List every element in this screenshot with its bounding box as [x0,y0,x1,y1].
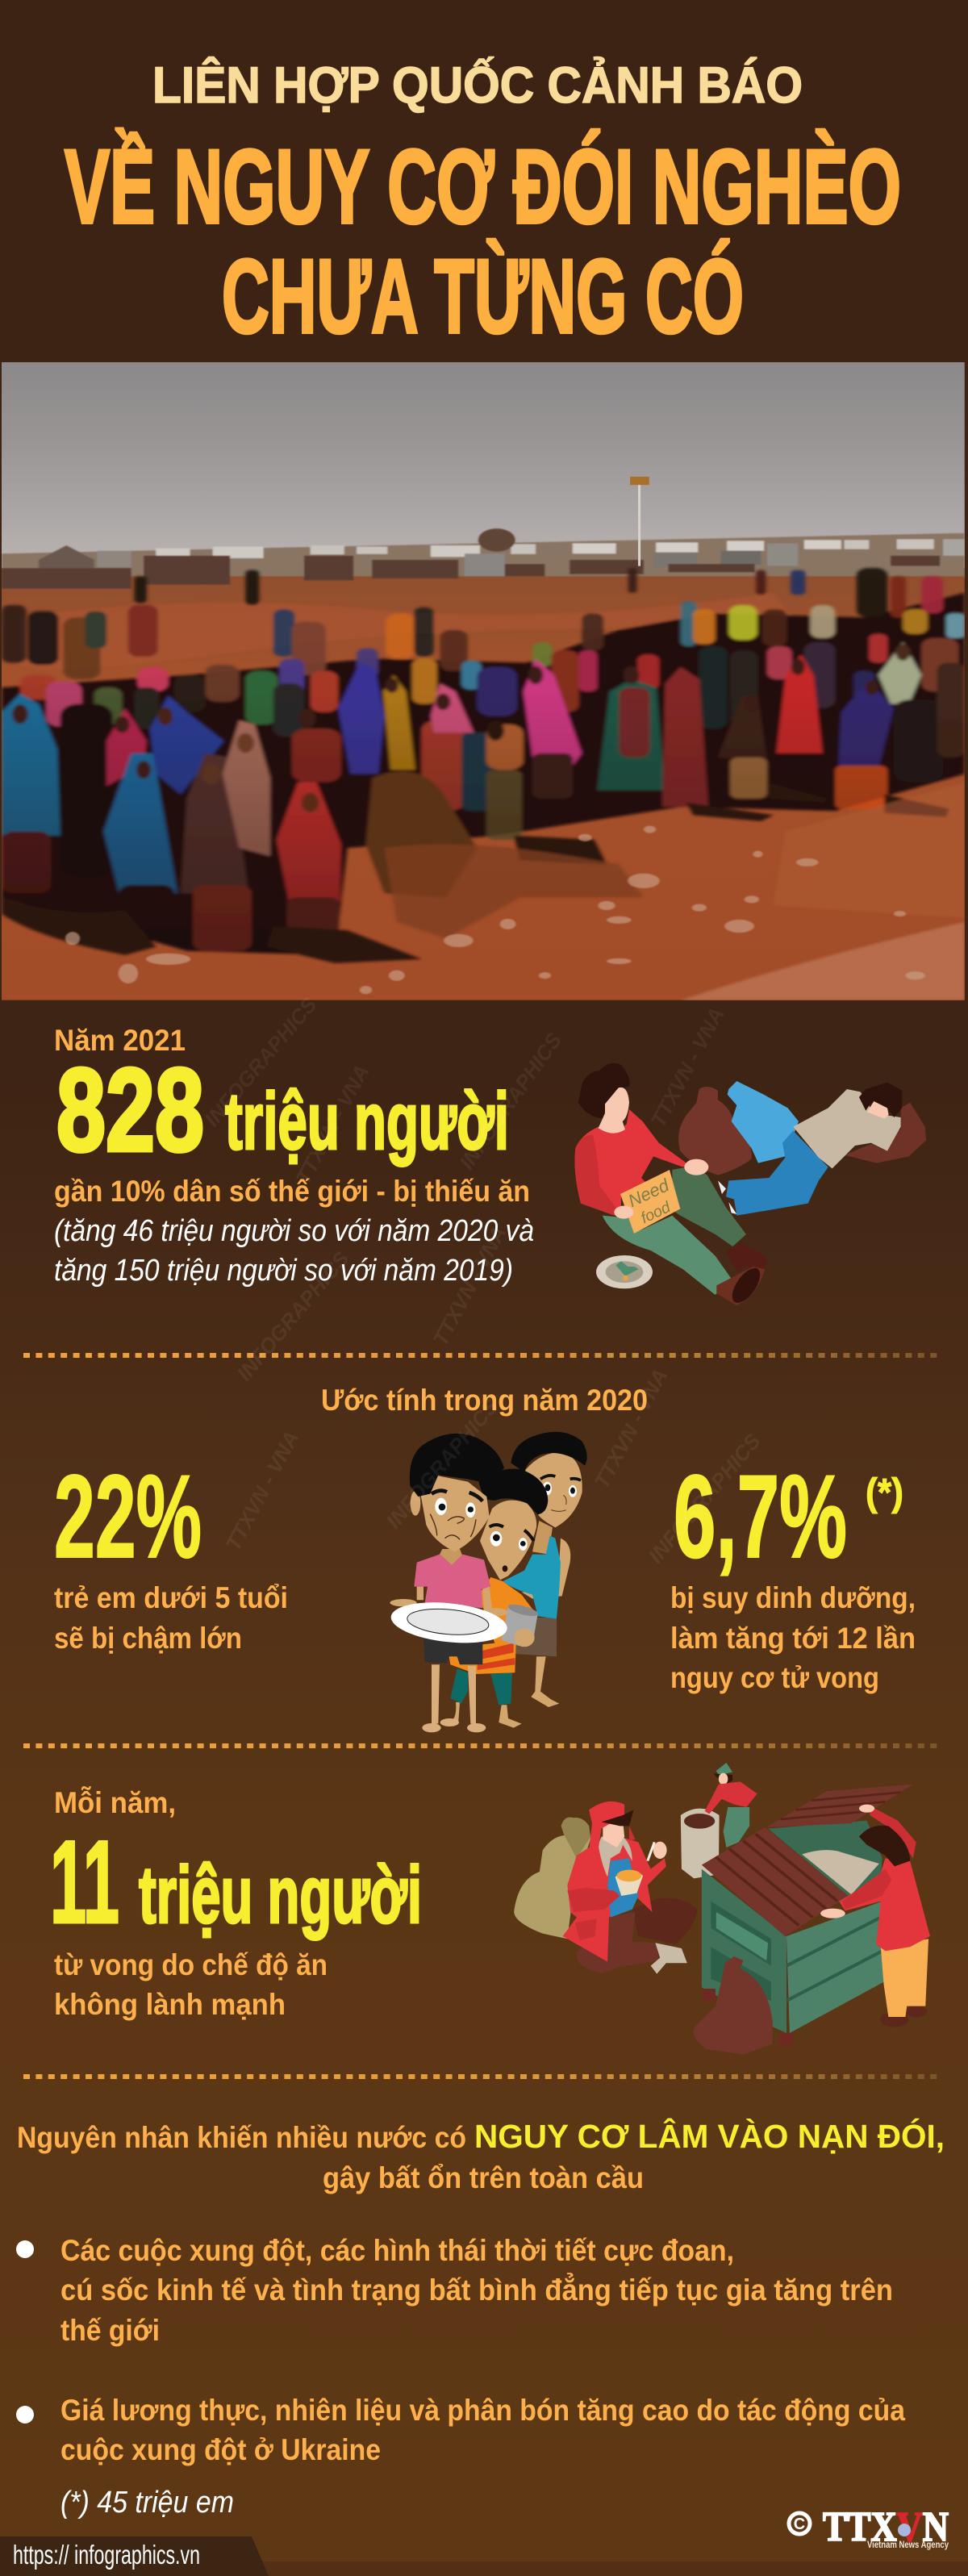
crowd base mass [2,593,965,955]
need food sign: food [639,1199,674,1227]
divider 3 [23,2074,941,2079]
stat: 11 million: từ vong do chế độ ăn [54,1948,328,1981]
bullet 2: Giá lương thực, nhiên liệu và phân bón tăng cao do tác động của [60,2394,905,2427]
faces [12,704,28,724]
crowd shade [2,694,963,955]
title: LIÊN HỢP QUỐC CẢNH BÁO [152,56,803,114]
watermarks: INFOGRAPHICS [644,1429,766,1568]
photo: crowd waiting on red earth [2,360,965,1000]
brown bag [694,1956,773,2055]
stat: 11 million: 11 [50,1816,119,1948]
watermarks: INFOGRAPHICS [454,1028,566,1174]
causes heading [17,2118,945,2194]
stat: 6.7 percent [670,1451,916,1694]
italic note: tăng 150 triệu người so với năm 2019) [54,1254,513,1288]
stat: 6.7 percent: 6,7% [674,1451,847,1582]
illustration: three starving children [389,1432,587,1732]
divider 1 [23,1353,941,1358]
bullet 1: thế giới [60,2314,160,2347]
italic note: (tăng 46 triệu người so với năm 2020 và [54,1214,534,1248]
stat: 22 percent: 22% [54,1451,202,1582]
watermarks: TTXVN - VNA [220,1427,304,1555]
shrub [366,771,477,897]
left child [432,1664,476,1724]
middle child [452,1702,522,1728]
woman at dumpster [880,2012,909,2027]
front figures [2,694,60,836]
footnote: (*) 45 triệu em [60,2486,234,2520]
rocks [65,825,925,994]
label: year 2021: Năm 2021 [54,1024,186,1057]
footer band: https:// infographics.vn [13,2540,200,2570]
need food sign: Need [625,1175,673,1211]
back rows [273,609,295,657]
watermarks: TTXVN - VNA [428,1222,511,1350]
crowd [2,568,965,1000]
watermarks [200,992,766,1568]
stat: 11 million: triệu người [139,1850,422,1940]
stat: 6.7 percent: nguy cơ tử vong [670,1661,879,1694]
stat: 22 percent: sẽ bị chậm lớn [54,1622,242,1655]
section heading: estimate 2020: Ước tính trong năm 2020 [321,1384,648,1417]
watermarks: INFOGRAPHICS [200,992,322,1131]
stat: 6.7 percent: bị suy dinh dưỡng, [670,1581,916,1614]
stat: 22 percent [54,1451,288,1655]
dumpster [702,1869,786,2033]
watermarks: INFOGRAPHICS [232,1246,354,1385]
stat: 11 million: không lành mạnh [54,1988,286,2021]
watermarks: TTXVN - VNA [589,1365,673,1493]
stat: 11 million: Mỗi năm, [54,1786,176,1819]
hands and plate [390,1599,417,1606]
trash can [681,1809,720,1878]
illustration: people scavenging from a dumpster [514,1763,930,2055]
causes heading: Nguyên nhân khiến nhiều nước có [17,2121,466,2154]
stat: 6.7 percent: (*) [866,1472,903,1514]
bullet 2: cuộc xung đột ở Ukraine [60,2433,381,2466]
illustration: homeless people with need food sign [574,1063,926,1307]
stat: 22 percent: trẻ em dưới 5 tuổi [54,1581,288,1614]
stat: 11 million [50,1786,422,2021]
causes heading: NGUY CƠ LÂM VÀO NẠN ĐÓI, [474,2118,945,2155]
logo: TTXVN: C [794,2515,805,2533]
lighter dirt [774,782,965,918]
watermarks: INFOGRAPHICS [382,1394,503,1533]
italic note [54,1214,534,1288]
bullet 2 [16,2394,905,2466]
causes heading: gây bất ổn trên toàn cầu [323,2161,644,2194]
title [65,56,901,355]
bullet 1 [16,2234,893,2347]
need food sign [620,1170,680,1234]
stat: 6.7 percent: làm tăng tới 12 lần [670,1622,916,1655]
watermarks: TTXVN - VNA [290,1061,374,1188]
bullet 1: Các cuộc xung đột, các hình thái thời tiết cực đoan, [60,2234,734,2267]
footer band [0,2536,968,2576]
logo: TTXVN: TTXVN [823,2504,949,2550]
triệu người: triệu người [225,1076,509,1167]
description: gần 10% dân số thế giới - bị thiếu ăn [54,1175,530,1208]
logo: TTXVN: Vietnam News Agency [867,2539,949,2550]
ground texture [19,593,804,669]
lamp post [638,484,640,566]
buildings [2,533,965,576]
watermarks: TTXVN - VNA [645,1004,729,1131]
divider 2 [23,1743,941,1748]
big number 828: 828 [56,1044,204,1175]
stat: 828 million [54,1024,534,1288]
shadows [2,782,949,963]
bullet 1: cú sốc kinh tế và tình trạng bất bình đẳng tiếp tục gia tăng trên [60,2273,893,2307]
